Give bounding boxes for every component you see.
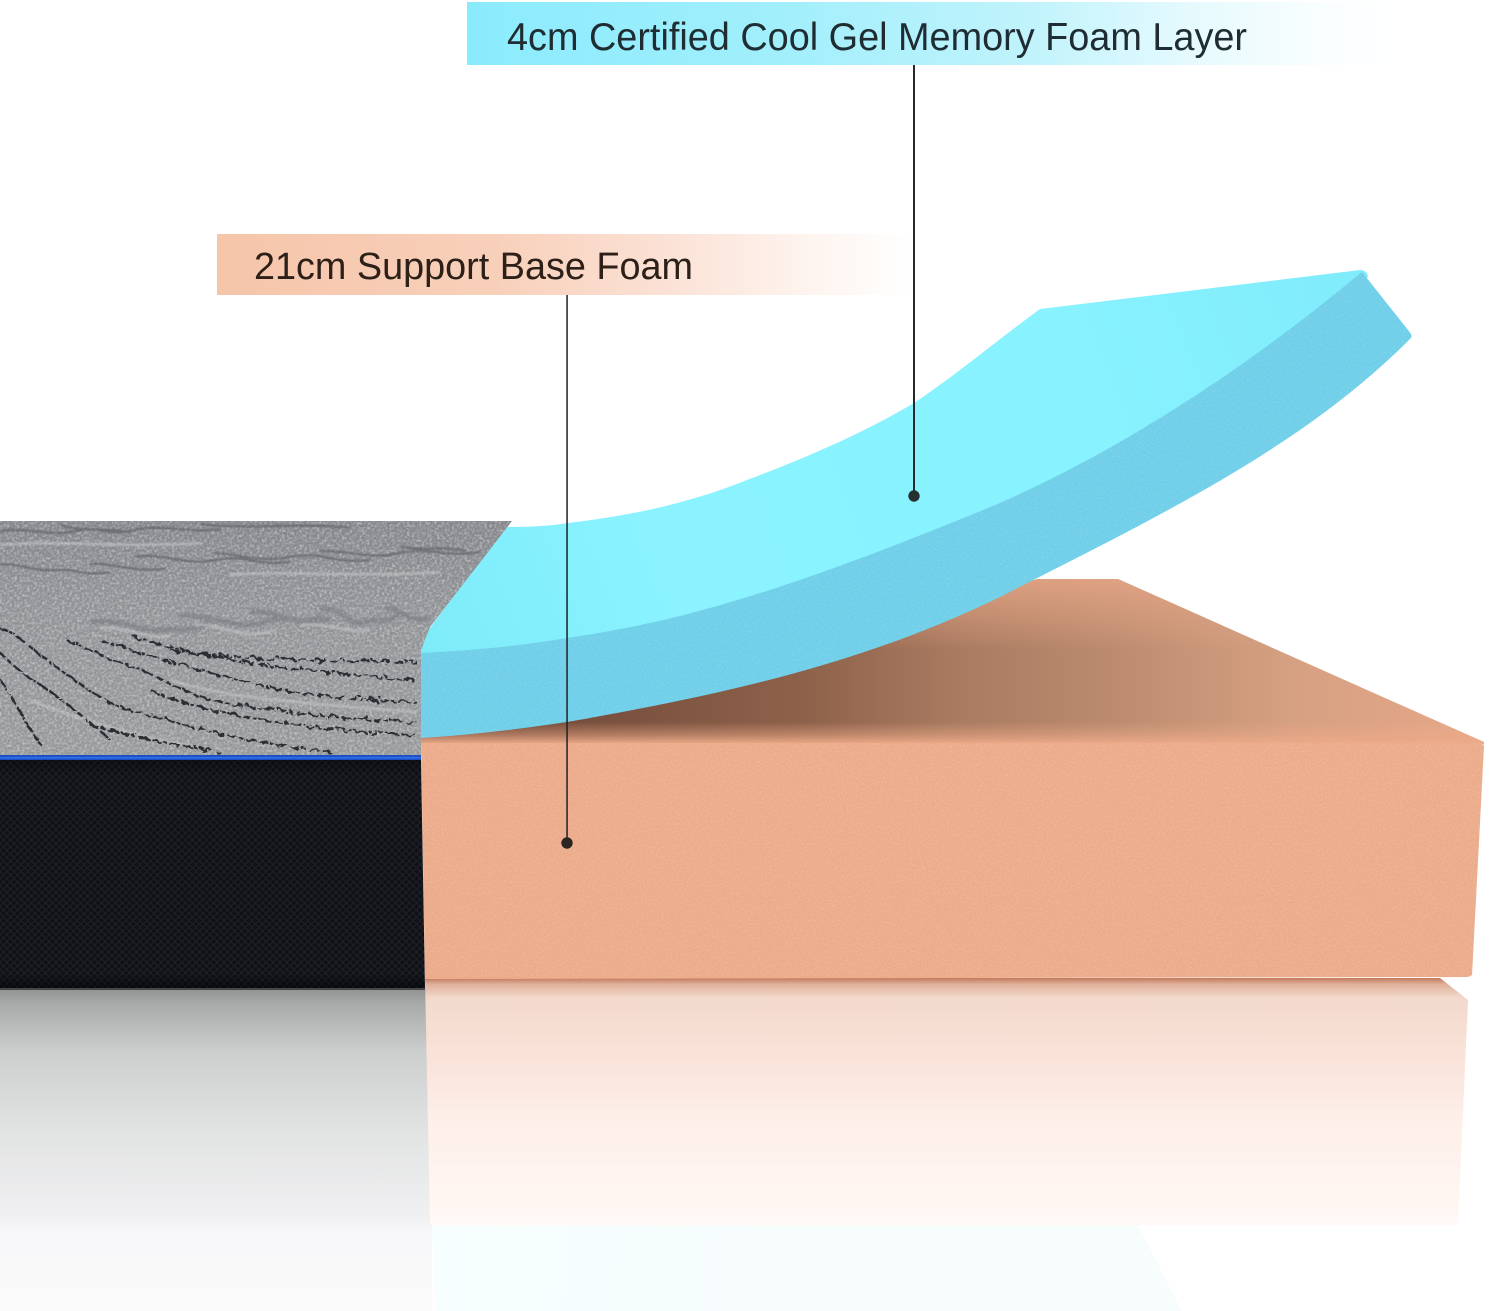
- top face highlights: [421, 579, 1484, 744]
- mattress cover: [0, 521, 512, 990]
- cool gel memory foam layer: [415, 270, 1413, 740]
- base foam top face: [421, 579, 1484, 744]
- black knit side panel: [0, 760, 425, 988]
- label text: 21cm Support Base Foam: [254, 246, 693, 288]
- gel layer top face: [415, 270, 1368, 660]
- upper ripples: [0, 524, 480, 574]
- label: 21cm base foam: [217, 234, 917, 295]
- blue piping: [0, 755, 421, 760]
- stitched tracks: [0, 628, 417, 753]
- floor reflection: blue layer: [432, 1225, 1182, 1311]
- label: 4cm gel layer: [467, 2, 1402, 65]
- base foam block: [421, 579, 1484, 979]
- label background: [467, 2, 1402, 65]
- floor reflection: cover: [0, 988, 432, 1311]
- leader line: gel layer: [908, 65, 920, 502]
- quilted top fabric: [0, 521, 512, 756]
- floor reflection: peach foam: [425, 978, 1468, 1225]
- gel layer front side: [421, 272, 1412, 738]
- label text: 4cm Certified Cool Gel Memory Foam Layer: [507, 16, 1247, 59]
- base foam front face: [421, 743, 1484, 979]
- label background: [217, 234, 917, 295]
- leader line: base foam: [561, 295, 573, 849]
